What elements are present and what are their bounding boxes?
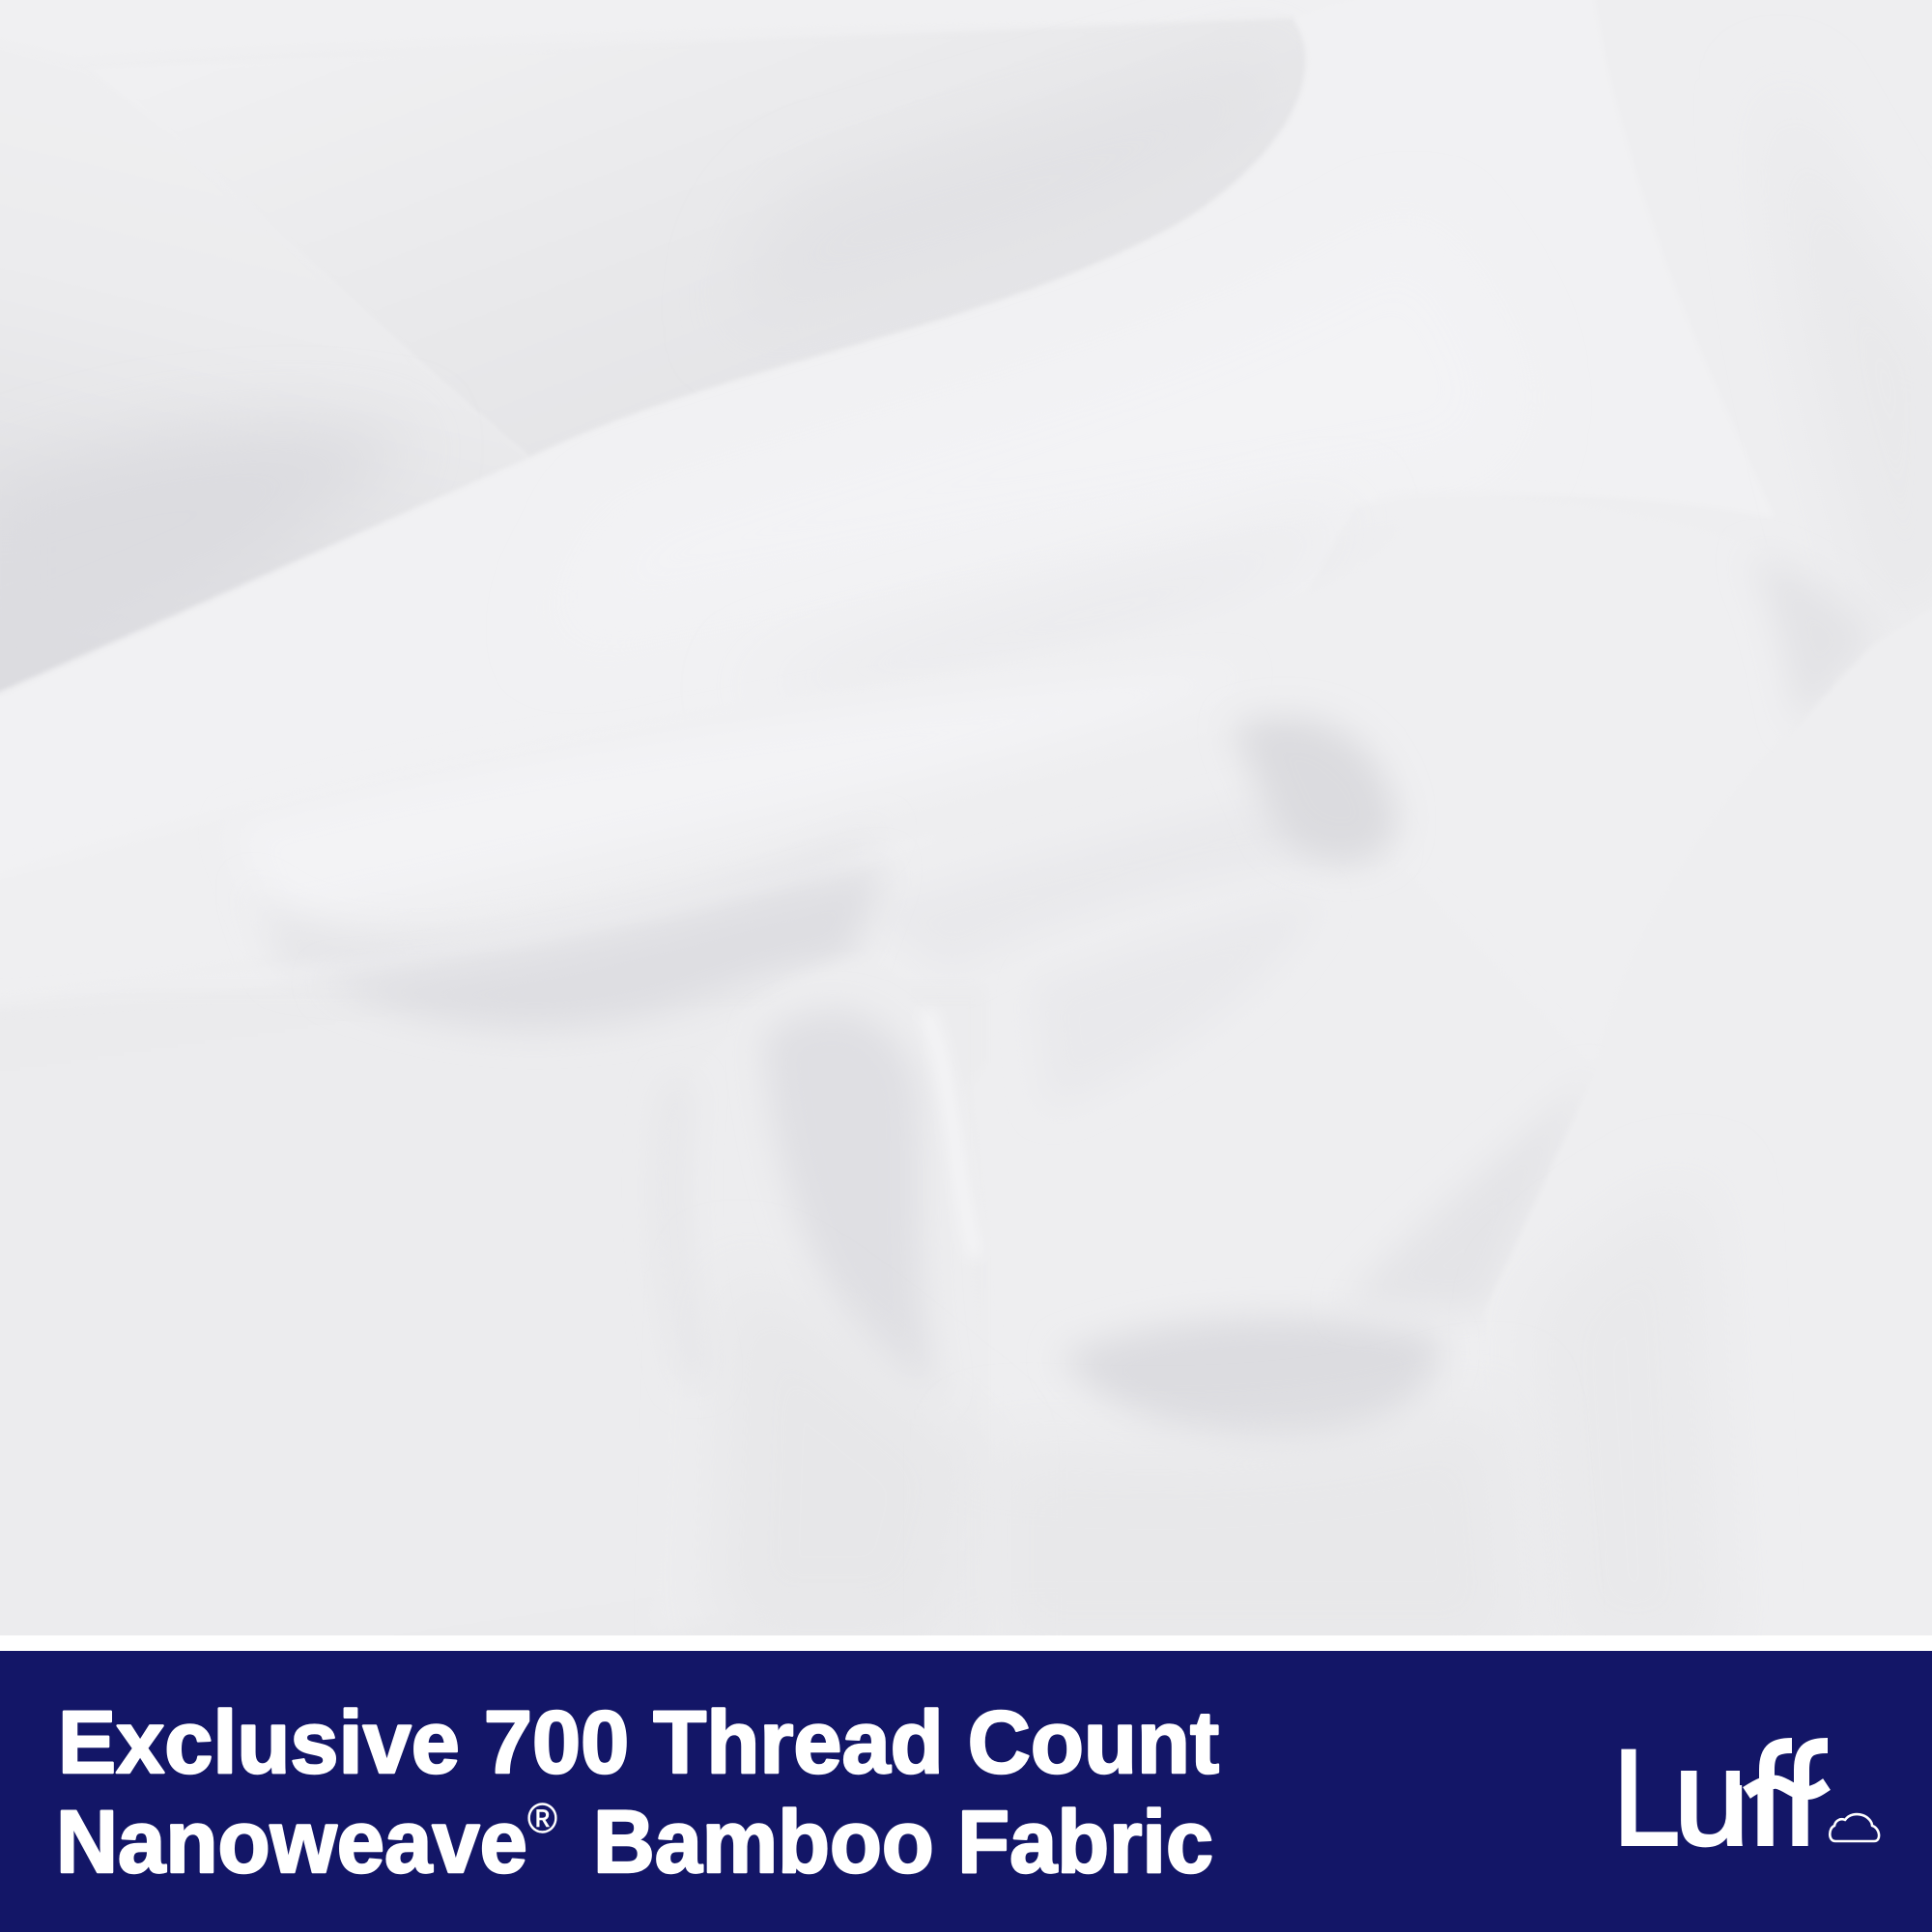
valley beneath strip (1749, 554, 1878, 727)
panel soft shade (1035, 899, 1319, 1109)
headline line 1: Exclusive 700 Thread Count (58, 1693, 1219, 1792)
headline line 2: Nanoweave: Nanoweave (56, 1793, 527, 1891)
logo f top mask (1740, 1724, 1833, 1785)
knot underside fold (863, 788, 1392, 974)
right strip sheen (1775, 74, 1932, 640)
fold shadow under lip (321, 863, 887, 1029)
second band (0, 495, 1875, 1072)
pocket head light (653, 961, 985, 1627)
footer banner: navy background (0, 1651, 1932, 1932)
logo wordmark (1613, 1721, 1821, 1873)
pocket bright crease (926, 1010, 976, 1257)
right lower shade (1528, 1182, 1725, 1663)
lower centre cloth shade (985, 1392, 1528, 1663)
lower left cloth (0, 985, 985, 1932)
band valley (739, 505, 1355, 694)
logo f hooks (1767, 1746, 1828, 1789)
logo: Luff with cloud (1613, 1721, 1880, 1855)
pocket soft lower shade (715, 1269, 985, 1638)
upper bowl panel (86, 18, 1306, 458)
pocket left ridge (672, 1084, 696, 1380)
main light band (0, 0, 1775, 887)
central right panel (967, 863, 1595, 1368)
lip underside shade (246, 826, 887, 983)
left deep shade (0, 426, 419, 690)
knot shadow (1233, 717, 1399, 862)
icon: cloud (1830, 1814, 1879, 1841)
lower fold shadow (1060, 1318, 1441, 1441)
pocket inner shade (764, 1010, 936, 1392)
left shadow wedge (0, 37, 529, 702)
top strip highlight (0, 0, 1355, 62)
diagonal shade (1343, 1074, 1595, 1312)
logo wavy crossbar (1747, 1782, 1827, 1793)
headline line 2: Bamboo Fabric: Bamboo Fabric (593, 1793, 1213, 1891)
bowl deep shadow (739, 49, 1283, 332)
band two highlight (234, 671, 1244, 924)
lip edge highlight (0, 838, 936, 1001)
right lower panel (1485, 591, 1932, 1651)
headline text (56, 1693, 1219, 1891)
right drape strip (1592, 0, 1932, 643)
band bright core (554, 222, 1512, 640)
registered mark: ® (527, 1795, 557, 1842)
